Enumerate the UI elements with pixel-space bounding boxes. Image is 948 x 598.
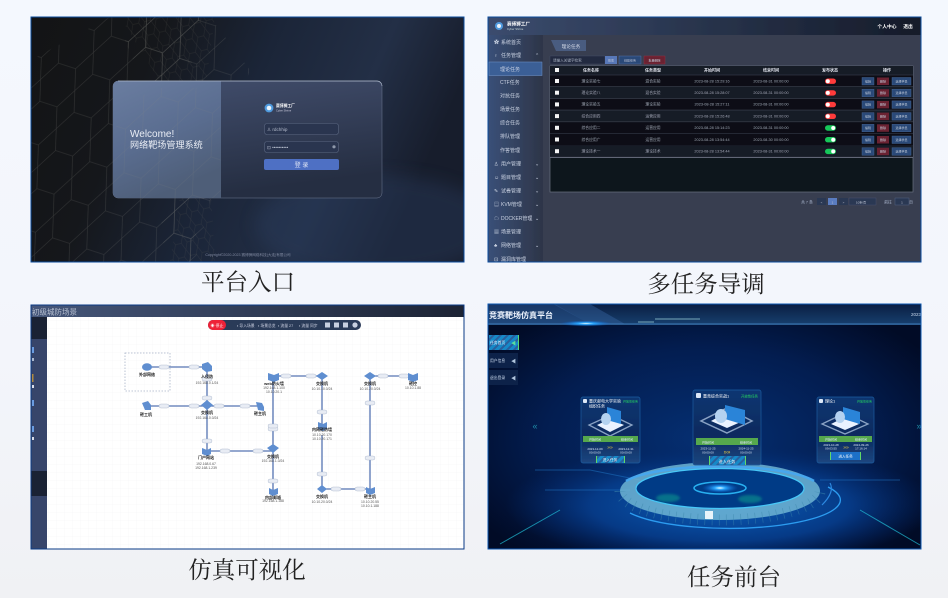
table row 1: 编辑 [865,78,871,83]
table row 2: 编辑 [865,90,871,95]
node labels: 10.10.20.170 [312,433,332,437]
task card: left: 进入任务 [603,457,618,462]
top bar: Cyber Shrine [507,27,524,31]
network nodes [142,362,418,496]
sidebar: ⌃ [535,53,539,59]
table row 1: 删除 [880,78,886,83]
table row 6: 2023-08-30 00:00:00 [753,138,789,142]
table row 5: 2023-08-28 15:14:23 [694,126,730,130]
network links [146,367,413,490]
node labels: 10.10.1.188 [361,504,379,508]
task card: right: »» [843,445,849,451]
node labels: 内网靶防墙 [312,426,332,432]
sidebar: 试卷管理 [501,188,521,194]
welcome text [130,129,203,150]
table row 1: 选择学员 [895,78,908,83]
table row 1 [555,78,911,85]
side menu: 退出登录 [490,375,505,380]
table row 3: 2023-08-31 00:00:00 [753,103,789,107]
task table: 结束时间 [763,66,779,72]
table row 6: 2023-08-28 13:54:44 [694,138,730,142]
node labels: 靶控 [409,380,417,386]
copyright: Copyright©2020-2023 赛博狮网络科技(大连)有限公司 [205,252,291,257]
sidebar: ⌄ [535,175,539,181]
logo: Cyber Shrine [276,108,292,112]
table row 1: 2023-08-28 15:29:16 [694,79,730,83]
table row 5: 2023-08-31 00:00:00 [753,126,789,130]
table row 4: 选择学员 [895,113,908,118]
pagination: 页 [909,200,913,204]
search and action buttons: 创建任务 [624,58,636,62]
panel: login screen (平台入口) [32,18,464,262]
search and action buttons [550,56,665,64]
task card: center: 开始时间 [702,440,714,444]
table row 6: 选择学员 [895,137,908,142]
task card: left: 2023-12-31 [618,447,634,451]
table row 4: 删除 [880,113,886,118]
table row 2: 2023-08-31 00:00:00 [753,91,789,95]
task table: 任务类型 [645,66,661,72]
sidebar: 网络管理 [501,242,521,249]
password field [264,142,338,152]
table row 7: 删除 [880,148,886,154]
toolbar: ▪ 导入场景 [237,323,255,328]
sidebar: ⊡ [494,257,498,263]
node labels: 靶主机 [254,410,266,416]
login button [264,159,339,170]
header banner: 2023 [911,312,922,317]
title bar [31,305,464,317]
table row 5: 综合应用二 [582,125,601,130]
table row 5: 编辑 [865,125,871,130]
node labels: 192.168.1.100 [263,386,285,390]
side menu: ◀ [511,359,516,365]
task card: left: 开始时间 [589,436,601,442]
sidebar: 漏洞库管理 [501,256,526,263]
panel 2 border [488,17,921,262]
toolbar: ▪ 场景总览 [258,323,276,328]
task card: center: 2023-11-25 [700,446,716,450]
sidebar: 用户管理 [501,160,521,168]
task table: 开始时间 [704,66,720,72]
node labels: 交换机 [267,453,279,459]
panel: simulation topology (仿真可视化) [31,305,464,549]
sidebar: 对抗任务 [500,92,520,100]
task card: right [817,397,874,463]
table row 7: 理论技术一 [582,148,601,154]
task card: left: 结束时间 [621,436,633,442]
sidebar: 作答管理 [500,147,520,154]
task card: center: 结束时间 [740,440,752,444]
table row 7: 编辑 [865,148,871,154]
sidebar: 排队管理 [500,133,520,140]
table row 3: 选择学员 [895,102,908,107]
table row 2: 2023-08-28 15:28:07 [694,91,730,95]
node labels: 10.10.20.55 [361,500,379,504]
task card: center: 2024-11-25 [738,446,754,450]
node labels: 10.10.20.0/24 [312,500,332,504]
node labels: 10.10.20.1 [266,390,282,394]
side menu: ◀ [511,376,516,382]
table row 2: 混合实验 [645,90,661,95]
search and action buttons: 请输入关键字检索 [553,58,582,62]
table row 7: 2023-08-31 00:00:00 [753,150,789,154]
sidebar: ⌄ [535,162,539,168]
task card: center: 重竞综合实战1 [703,392,730,398]
side menu [489,335,519,385]
sidebar: 任务管理 [501,52,521,59]
table row 7: 理论技术 [645,148,661,154]
node labels: 10.10.10.0/24 [312,387,332,391]
table row 2 [555,89,911,97]
sidebar: ⌄ [535,216,539,222]
node labels: 交换机 [364,380,376,386]
panel: task frontend (任务前台) [488,304,935,565]
task card: center [693,390,761,465]
node labels: 交换机 [316,380,328,386]
task card: right: 开始时间 [825,436,837,442]
sidebar: ♙ [494,162,498,168]
title bar: 初级城防场景 [32,306,77,316]
panel: multi-task console (多任务导调) [488,17,921,263]
task table: 任务名称 [583,66,599,72]
task card: right: 2023-10-28 [823,443,839,447]
node labels: 交换机 [201,409,213,415]
table row 4: 2023-08-28 15:26:48 [694,114,730,118]
sidebar: ☁ [494,216,499,222]
task table: 发布状态 [822,66,838,72]
task card: center: 00:00:00 [740,450,752,454]
panel 1 border [31,17,464,262]
task card: left: »» [607,445,613,451]
top bar: 退出 [903,23,913,30]
table row 5: 选择学员 [895,125,908,130]
left rail [31,317,47,549]
panel 4 border [488,304,921,549]
toolbar: ▪ 流量 27 [278,323,293,328]
link port labels [159,365,409,491]
caption: 任务前台: 任务前台 [687,564,781,591]
node labels: 192.168.0.67 [196,462,216,466]
table row 2: 选择学员 [895,90,908,95]
task card: right: 结束时间 [855,436,867,442]
sidebar: 系统首页 [501,39,521,46]
sidebar: ♣ [494,243,498,249]
caption: 平台入口: 平台入口 [201,269,295,296]
table row 1: 混合实验 [645,78,661,83]
sidebar: CTF任务 [500,79,520,86]
side menu: 用户信息 [490,358,505,363]
password field: ⊡ •••••••••• [267,145,289,150]
table row 3: 理论实验 [645,102,661,107]
pagination [801,198,913,205]
login button: 登 录 [295,161,308,169]
table row 4 [555,113,911,120]
table row 6: 删除 [880,137,886,142]
node labels [139,371,421,508]
header banner [488,304,922,326]
sidebar: ⌄ [535,243,539,249]
sidebar: 场景管理 [501,228,521,236]
top bar: 个人中心 [877,23,897,30]
logo: 赛博狮工厂 [276,103,295,108]
toolbar: ▪ 流量 同步 [299,323,318,328]
node labels: 192.168.1.0/24 [262,459,284,463]
node labels: 外部网络 [139,371,155,377]
task card: right: 进入任务 [838,454,853,458]
task card: right: 09:03:55 [825,446,837,450]
task card: left: 开放性任务 [623,398,638,404]
task card: center: »» [724,450,731,456]
toolbar [208,320,361,330]
sidebar: ▦ [494,230,499,236]
sidebar: ⌄ [535,188,539,194]
table row 5: 删除 [880,125,886,130]
table row 6 [555,136,911,144]
caption: 多任务导调: 多任务导调 [647,271,765,298]
table row 4: 2023-08-31 00:00:00 [753,114,789,118]
table row 1: 理论实验七 [582,78,601,83]
table row 3: 理论实验五 [582,102,601,107]
side menu: 任务首页 [490,340,505,345]
side menu: ◀ [511,341,516,347]
table row 6: 综合应用广 [582,137,601,142]
table row 4: 运营应用 [645,113,661,118]
username field [264,124,338,134]
panel 3 border [31,305,464,549]
task card: right: 17:16:14 [855,446,867,450]
node labels: 门户网站 [198,454,214,460]
table row 6: 运营应用 [645,137,661,142]
tab: 理论任务: 理论任务 [562,43,581,50]
hologram ring platform [500,462,920,545]
table row 6: 编辑 [865,137,871,142]
task card: center: 00:00:00 [702,450,714,454]
node labels: 10.10.20.171 [312,437,332,441]
task card: right: 开放性任务 [857,398,872,404]
sidebar: ✿ [494,40,499,46]
table row 5 [555,124,911,132]
table row 2: 删除 [880,90,886,95]
node labels: 192.168.0.1/24 [196,381,218,385]
task card: right: 2024-09-26 [853,443,869,447]
node labels: 交换机 [316,493,328,499]
task card: center: 开放性任务 [741,394,759,398]
table row 3: 删除 [880,102,886,107]
task card: left: 组织任务 [589,402,605,408]
task card: left: 2023-12-09 [587,447,603,451]
table row 7 [555,148,911,155]
task card: left: 重庆邮电大学实验 [589,398,621,404]
sidebar: DOCKER管理 [501,215,532,222]
task card: left [581,397,640,463]
caption: 仿真可视化: 仿真可视化 [188,557,306,584]
table row 3: 2023-08-28 15:27:11 [695,103,729,107]
sidebar: ✎ [494,188,498,194]
node labels: 10.10.1.88 [405,386,421,390]
table row 3 [555,101,911,108]
login card [113,81,382,198]
sidebar: 综合任务 [500,120,520,126]
table row 3: 编辑 [865,102,871,107]
table row 7: 2023-08-28 13:54:44 [694,150,730,154]
sidebar: ▤ [494,202,499,208]
table row 2: 理论实验八 [582,90,601,95]
sidebar: KVM管理 [501,201,522,208]
pagination: 1 [901,200,903,204]
sidebar [488,35,543,263]
pagination: 前往 [884,200,892,204]
sidebar: 题目管理 [501,174,521,181]
node labels: 入侵防 [201,373,213,379]
task card: right: 理论1 [825,398,836,404]
search and action buttons: 批量删除 [648,58,661,62]
sidebar: ⌄ [535,202,539,208]
table row 4: 编辑 [865,113,871,118]
username field: ♙ rdchhip [267,127,288,132]
carousel arrows [532,424,920,428]
node labels: 192.168.0.0/24 [196,416,218,420]
welcome text: Welcome! [130,129,174,140]
table row 1: 2023-08-31 00:00:00 [753,79,789,83]
node labels: 靶主机 [364,493,376,499]
pagination: > [843,200,845,204]
welcome text: 网络靶场管理系统 [130,139,203,150]
pagination: 1 [832,200,834,204]
node labels: 靶工机 [140,411,152,417]
task table: 操作 [883,66,891,72]
node labels: 10.10.20.0/24 [360,387,380,391]
task table [550,66,913,192]
task card: left: 00:00:00 [620,450,632,454]
dashed selection box [125,353,170,391]
header banner: 竞赛靶场仿真平台 [489,310,553,320]
node labels: 192.168.1.188 [262,499,284,503]
sidebar: 理论任务 [500,66,520,73]
logo [265,103,295,112]
sidebar: ☺ [494,175,499,181]
node labels: web防火墙 [263,380,284,386]
task card: left: 00:00:00 [589,450,601,454]
node labels: 192.168.1.239 [195,466,217,470]
search and action buttons: 搜索 [608,58,614,62]
table row 4: 综合应用四 [582,113,601,118]
tab: 理论任务 [551,40,586,51]
sidebar: 场景任务 [500,106,520,113]
top bar: 赛博狮工厂 [507,20,530,28]
task card: center: 进入任务 [719,458,736,465]
pagination: 共 7 条 [801,200,813,204]
sidebar: ♀ [494,53,498,59]
carousel arrows: » [916,421,922,431]
carousel arrows: « [532,421,538,431]
node labels: 内部邮箱 [265,494,281,500]
table row 5: 运营应用 [645,125,661,130]
pagination: < [821,200,823,204]
pagination: 10条/页 [856,199,866,204]
top bar [488,17,921,35]
table row 7: 选择学员 [895,148,908,154]
toolbar: ◉ 停止 [210,322,224,328]
